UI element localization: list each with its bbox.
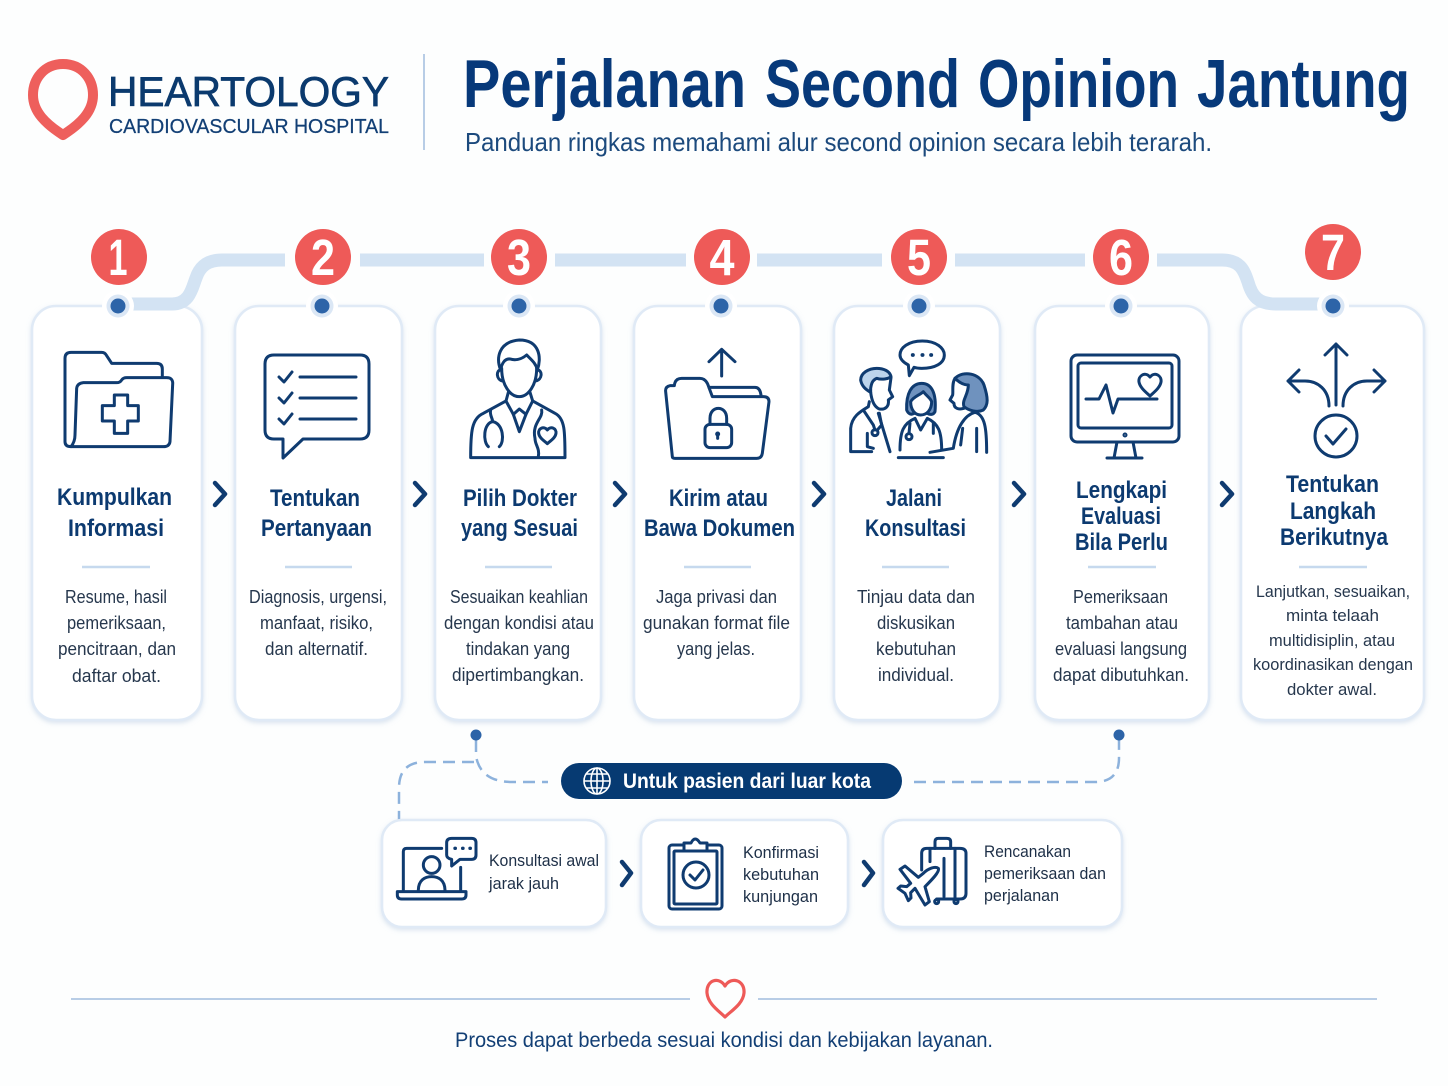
step number 1: 1 bbox=[108, 229, 128, 286]
step 3 text bbox=[444, 485, 594, 685]
step number 4 bbox=[694, 229, 750, 286]
step 7 heading: Berikutnya bbox=[1280, 524, 1389, 551]
step 1 text bbox=[57, 484, 176, 686]
icon: question checklist bubble bbox=[265, 355, 369, 458]
step 1 description bbox=[58, 587, 176, 686]
step 3 description: Sesuaikan keahlian bbox=[450, 587, 588, 607]
step 5 heading bbox=[865, 485, 966, 542]
panel: step 1 card bbox=[32, 306, 202, 720]
icon: logo pin bbox=[33, 64, 93, 135]
step 6 description bbox=[1053, 587, 1189, 685]
travel label bbox=[984, 843, 1106, 905]
confirm label: kebutuhan bbox=[743, 866, 819, 884]
remote consultation label: jarak jauh bbox=[488, 875, 559, 893]
step 2 description bbox=[249, 587, 387, 659]
icon: medical folder bbox=[65, 352, 173, 447]
step 7 description: Lanjutkan, sesuaikan, bbox=[1256, 582, 1410, 601]
step 6 description: tambahan atau bbox=[1066, 613, 1178, 633]
travel label: Rencanakan bbox=[984, 843, 1071, 861]
icon: footer heart bbox=[707, 980, 744, 1017]
panel: confirm visit needs bbox=[641, 820, 848, 927]
panel: step 4 card bbox=[634, 306, 801, 720]
panel: step 6 card bbox=[1035, 306, 1209, 720]
step 2 text bbox=[249, 485, 387, 659]
step 3 heading: Pilih Dokter bbox=[463, 485, 577, 512]
travel label: pemeriksaan dan bbox=[984, 865, 1106, 883]
step 7 heading: Langkah bbox=[1290, 498, 1376, 525]
title bbox=[463, 46, 1410, 122]
icon: clipboard check bbox=[669, 839, 722, 909]
step 5 text bbox=[857, 485, 975, 685]
confirm label bbox=[743, 844, 819, 906]
timeline connector bbox=[128, 260, 1322, 304]
panel: step 7 card bbox=[1241, 306, 1424, 720]
panel: step 3 card bbox=[435, 306, 601, 720]
step number 6: 6 bbox=[1109, 229, 1133, 286]
step 1 description: daftar obat. bbox=[72, 666, 161, 686]
step 6 heading: Lengkapi bbox=[1076, 477, 1167, 504]
step 7 description bbox=[1253, 582, 1413, 699]
step 6 heading: Evaluasi bbox=[1081, 503, 1161, 530]
step 7 description: dokter awal. bbox=[1287, 680, 1377, 699]
step 7 text bbox=[1253, 471, 1413, 699]
icon: globe bbox=[584, 768, 610, 794]
step 4 heading: Bawa Dokumen bbox=[644, 515, 795, 542]
step 6 description: Pemeriksaan bbox=[1073, 587, 1168, 607]
step 5 description: kebutuhan bbox=[876, 639, 956, 659]
step 4 description bbox=[643, 587, 790, 659]
remote consultation label: Konsultasi awal bbox=[489, 852, 599, 870]
step 3 description: dengan kondisi atau bbox=[444, 613, 594, 633]
step 4 heading: Kirim atau bbox=[669, 485, 768, 512]
logo bbox=[33, 64, 389, 138]
title: Perjalanan bbox=[463, 46, 746, 122]
step 3 heading bbox=[461, 485, 578, 542]
step 6 heading bbox=[1075, 477, 1168, 556]
step 5 description bbox=[857, 587, 975, 685]
step 5 description: individual. bbox=[878, 665, 954, 685]
pill: out-of-town patients bbox=[561, 763, 902, 799]
arrows between sub-steps bbox=[622, 862, 873, 885]
step number 2 bbox=[295, 229, 351, 286]
footer note: Proses dapat berbeda sesuai kondisi dan kebijakan layanan. bbox=[455, 1029, 993, 1052]
step 3 description: tindakan yang bbox=[466, 639, 570, 659]
icon: consultation group bbox=[851, 341, 987, 458]
title: Opinion bbox=[978, 46, 1179, 122]
step 5 description: Tinjau data dan bbox=[857, 587, 975, 607]
step number 5: 5 bbox=[907, 229, 931, 286]
step number 6 bbox=[1093, 229, 1149, 286]
step 2 heading: Tentukan bbox=[270, 485, 360, 512]
step 7 description: multidisiplin, atau bbox=[1269, 631, 1395, 650]
step 7 description: koordinasikan dengan bbox=[1253, 655, 1413, 674]
step 5 description: diskusikan bbox=[877, 613, 955, 633]
pill label: Untuk pasien dari luar kota bbox=[623, 770, 871, 793]
step 6 heading: Bila Perlu bbox=[1075, 529, 1168, 556]
arrows between steps bbox=[215, 483, 1232, 505]
step 1 description: pemeriksaan, bbox=[67, 613, 166, 633]
step 4 description: yang jelas. bbox=[677, 639, 755, 659]
travel label: perjalanan bbox=[984, 887, 1059, 905]
remote consultation label bbox=[488, 852, 599, 893]
step 3 description: dipertimbangkan. bbox=[452, 665, 584, 685]
step number 4: 4 bbox=[710, 229, 735, 286]
confirm label: kunjungan bbox=[743, 888, 818, 906]
icon: heart monitor bbox=[1071, 355, 1179, 458]
timeline dots bbox=[102, 290, 1349, 322]
title: Second bbox=[765, 46, 960, 122]
step 6 description: evaluasi langsung bbox=[1055, 639, 1187, 659]
icon: doctor bbox=[471, 340, 565, 458]
step 6 text bbox=[1053, 477, 1189, 685]
step 7 heading bbox=[1280, 471, 1389, 551]
step 4 description: gunakan format file bbox=[643, 613, 790, 633]
step 5 heading: Konsultasi bbox=[865, 515, 966, 542]
panel: step 2 card bbox=[235, 306, 402, 720]
step 1 heading: Kumpulkan bbox=[57, 484, 172, 511]
step 2 description: dan alternatif. bbox=[265, 639, 368, 659]
step number 1 bbox=[91, 229, 147, 286]
step 1 description: Resume, hasil bbox=[65, 587, 167, 607]
icon: luggage and plane bbox=[898, 838, 966, 905]
step 4 heading bbox=[644, 485, 795, 542]
logo wordmark: HEARTOLOGY bbox=[108, 68, 389, 115]
icon: laptop video call bbox=[397, 838, 476, 899]
step 4 description: Jaga privasi dan bbox=[656, 587, 777, 607]
step 3 description bbox=[444, 587, 594, 685]
step number 5 bbox=[891, 229, 947, 286]
step 1 heading bbox=[57, 484, 172, 542]
panel: remote consultation bbox=[382, 820, 606, 927]
panel: step 5 card bbox=[834, 306, 1000, 720]
step 1 description: pencitraan, dan bbox=[58, 639, 176, 659]
dashed branch connectors bbox=[399, 730, 1124, 820]
subtitle: Panduan ringkas memahami alur second opinion secara lebih terarah. bbox=[465, 127, 1212, 157]
step 2 description: manfaat, risiko, bbox=[260, 613, 373, 633]
confirm label: Konfirmasi bbox=[743, 844, 819, 862]
step 6 description: dapat dibutuhkan. bbox=[1053, 665, 1189, 685]
logo subtitle: CARDIOVASCULAR HOSPITAL bbox=[109, 116, 389, 138]
step 7 description: minta telaah bbox=[1286, 606, 1379, 625]
step number 3 bbox=[491, 229, 547, 286]
step number 3: 3 bbox=[507, 229, 531, 286]
step 2 heading: Pertanyaan bbox=[261, 515, 372, 542]
step number 2: 2 bbox=[311, 229, 335, 286]
step 3 heading: yang Sesuai bbox=[461, 515, 578, 542]
step number 7 bbox=[1305, 224, 1361, 281]
panel: plan exam and travel bbox=[883, 820, 1122, 927]
step 1 heading: Informasi bbox=[68, 515, 164, 542]
step 2 description: Diagnosis, urgensi, bbox=[249, 587, 387, 607]
step number 7: 7 bbox=[1321, 224, 1345, 281]
icon: secure folder upload bbox=[666, 349, 769, 458]
step 5 heading: Jalani bbox=[886, 485, 942, 512]
icon: next-step branching arrows bbox=[1288, 344, 1385, 457]
step 7 heading: Tentukan bbox=[1286, 471, 1379, 498]
step 2 heading bbox=[261, 485, 372, 542]
step 4 text bbox=[643, 485, 795, 659]
